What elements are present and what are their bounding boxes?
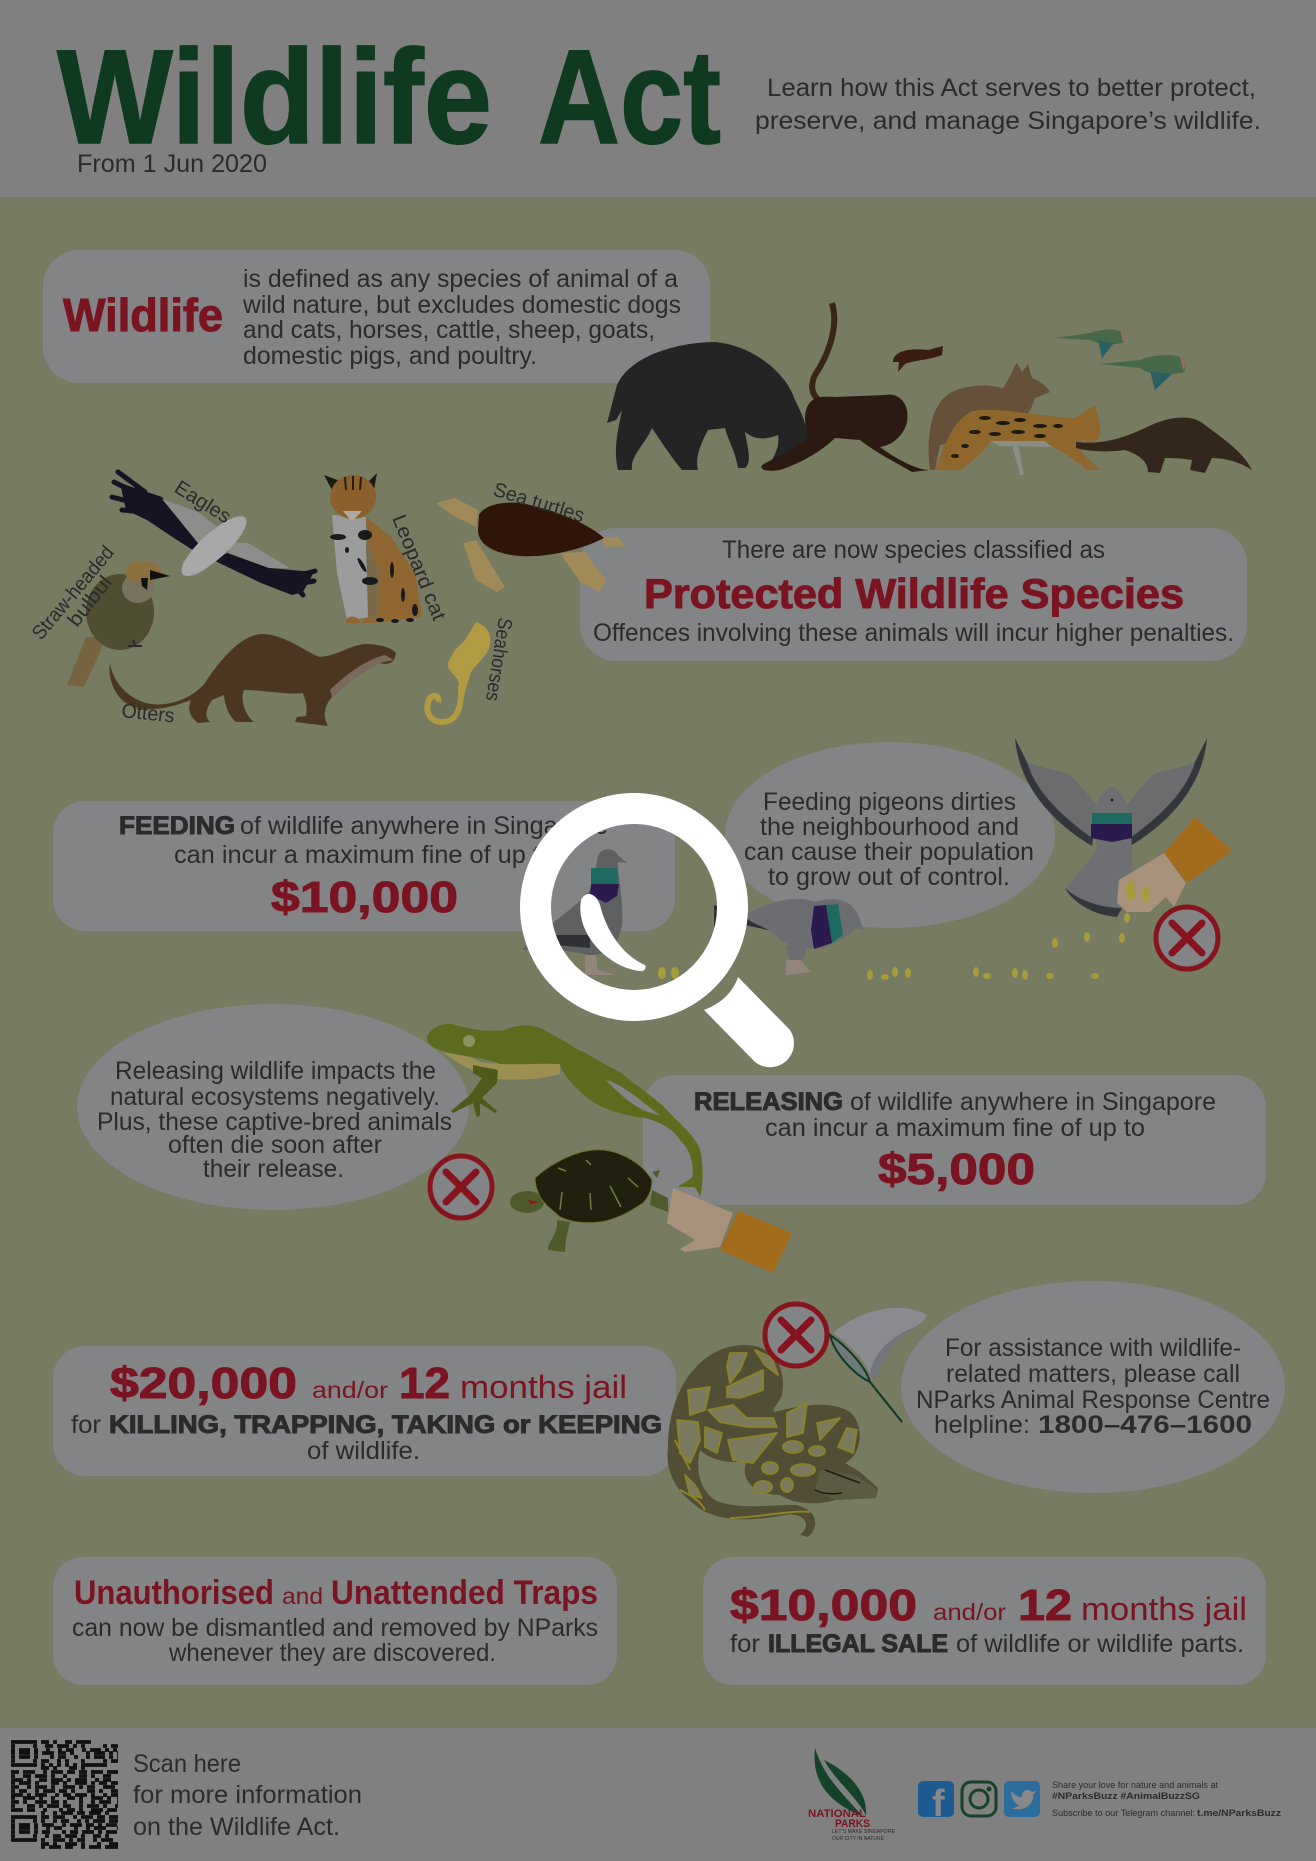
- title: Act: [538, 23, 721, 172]
- panel: wildlife definition: Wildlife: [63, 289, 223, 341]
- animal: parrot two: [1100, 355, 1187, 390]
- panel: feeding fine: can incur a maximum fine of up to: [174, 841, 554, 869]
- panel: wildlife definition: is defined as any species of animal of a: [243, 265, 678, 293]
- panel: killing penalty: of wildlife.: [307, 1437, 420, 1465]
- callout: feeding pigeons: the neighbourhood and: [760, 813, 1019, 841]
- callout: releasing impact: Plus, these captive-bred animals: [97, 1108, 452, 1136]
- panel: killing penalty: months jail: [460, 1369, 627, 1405]
- panel: illegal sale: 12: [1018, 1581, 1072, 1630]
- logo: National Parks: [808, 1748, 896, 1842]
- callout: releasing impact: [77, 1004, 469, 1210]
- panel: feeding fine: FEEDING: [119, 812, 235, 840]
- label: eagles: Eagles: [170, 477, 235, 528]
- logo: National Parks: PARKS: [835, 1818, 870, 1830]
- label: sea turtles: Sea turtles: [491, 479, 587, 527]
- header band: [0, 0, 1316, 197]
- panel: releasing fine: [643, 1075, 1266, 1205]
- icon: twitter: [1004, 1781, 1040, 1817]
- effective date: From 1 Jun 2020: [77, 150, 267, 178]
- label: seahorses: Seahorses: [481, 616, 516, 703]
- panel: illegal sale: $10,000: [730, 1581, 917, 1630]
- icon: prohibited sign killing: [765, 1304, 827, 1366]
- icon: python: [667, 1345, 878, 1537]
- animal: eagle: [112, 472, 315, 595]
- panel: traps: whenever they are discovered.: [168, 1639, 496, 1667]
- panel: protected wildlife species: Offences involving these animals will incur higher penalties.: [593, 619, 1234, 647]
- icon: instagram: [962, 1782, 996, 1816]
- callout: releasing impact: often die soon after: [168, 1131, 382, 1159]
- icon: protected species group: [28, 472, 625, 728]
- panel: traps: can now be dismantled and removed by NParks: [72, 1614, 598, 1642]
- panel: killing penalty: and/or: [312, 1377, 388, 1403]
- callout: feeding pigeons: [725, 742, 1055, 928]
- animal: otter: [110, 634, 396, 726]
- panel: killing penalty: [53, 1346, 676, 1476]
- social media text: Subscribe to our Telegram channel:: [1052, 1808, 1195, 1818]
- callout: helpline: helpline:: [934, 1411, 1030, 1439]
- panel: killing penalty: 12: [399, 1359, 450, 1408]
- callout: feeding pigeons: Feeding pigeons dirties: [763, 788, 1016, 816]
- panel: illegal sale: [703, 1557, 1266, 1685]
- panel: illegal sale: and/or: [933, 1599, 1006, 1625]
- callout: helpline: [901, 1281, 1285, 1493]
- animal: parrot one: [1055, 329, 1127, 358]
- animal: straw-headed bulbul: [67, 561, 170, 687]
- animal: sea turtle: [436, 498, 625, 592]
- animal: monkey: [762, 303, 929, 472]
- icon: terrapin: [510, 1150, 668, 1252]
- label: bulbul: bulbul: [64, 572, 117, 631]
- animal: leopard cat: [935, 405, 1100, 475]
- QR caption: on the Wildlife Act.: [133, 1813, 340, 1841]
- panel: killing penalty: KILLING, TRAPPING, TAKING or KEEPING: [109, 1411, 662, 1439]
- callout: releasing impact: their release.: [203, 1155, 344, 1183]
- panel: illegal sale: for: [730, 1630, 760, 1658]
- callout: helpline: related matters, please call: [946, 1360, 1240, 1388]
- social media text: #NParksBuzz #AnimalBuzzSG: [1052, 1791, 1200, 1801]
- social media text: t.me/NParksBuzz: [1197, 1808, 1282, 1818]
- panel: feeding fine: of wildlife anywhere in Singapore: [240, 812, 608, 840]
- logo: National Parks: NATIONAL: [808, 1808, 866, 1820]
- callout: releasing impact: Releasing wildlife impacts the: [115, 1057, 436, 1085]
- panel: killing penalty: $20,000: [110, 1359, 297, 1408]
- animal: seated leopard cat: [324, 473, 422, 623]
- panel: releasing fine: of wildlife anywhere in Singapore: [850, 1088, 1216, 1116]
- label: otters: Otters: [120, 700, 175, 728]
- panel: traps: Unauthorised: [74, 1574, 274, 1612]
- callout: feeding pigeons: to grow out of control.: [768, 863, 1010, 891]
- panel: feeding fine: [53, 801, 675, 931]
- label: straw-headed: Straw-headed: [28, 542, 119, 644]
- icon: facebook: f: [932, 1783, 945, 1825]
- QR caption: Scan here: [133, 1750, 241, 1778]
- subtitle: Learn how this Act serves to better protect,: [767, 74, 1256, 102]
- animal: mouse deer: [929, 363, 1050, 470]
- panel: killing penalty: for: [71, 1411, 101, 1439]
- panel: wildlife definition: domestic pigs, and poultry.: [243, 342, 537, 370]
- logo: National Parks: OUR CITY IN NATURE: [832, 1836, 885, 1842]
- icon: magnifying glass: [536, 808, 794, 1067]
- panel: wildlife definition: and cats, horses, cattle, sheep, goats,: [243, 316, 655, 344]
- panel: traps: Unattended Traps: [331, 1574, 598, 1612]
- callout: helpline: For assistance with wildlife-: [945, 1334, 1241, 1362]
- callout: releasing impact: natural ecosystems negatively.: [110, 1083, 440, 1111]
- icon: scattered seeds: [658, 913, 1130, 980]
- callout: helpline: NParks Animal Response Centre: [916, 1386, 1270, 1414]
- panel: protected wildlife species: There are now species classified as: [722, 536, 1105, 564]
- QR code: [11, 1742, 118, 1847]
- animal: wild boar: [607, 342, 810, 470]
- icon: releasing hand: [667, 1188, 792, 1273]
- footer band: [0, 1728, 1316, 1861]
- panel: protected wildlife species: [580, 528, 1247, 661]
- subtitle: [755, 74, 1261, 135]
- icon: snake hook: [830, 1308, 927, 1422]
- icon: hand feeding seeds: [1117, 817, 1232, 912]
- icon: prohibited sign feeding: [1156, 907, 1218, 969]
- icon: facebook: [918, 1781, 954, 1825]
- callout: helpline: 1800–476–1600: [1038, 1411, 1252, 1439]
- panel: releasing fine: can incur a maximum fine of up to: [765, 1114, 1145, 1142]
- panel: protected wildlife species: Protected Wildlife Species: [644, 570, 1184, 617]
- QR caption: [133, 1750, 362, 1841]
- panel: releasing fine: RELEASING: [694, 1088, 843, 1116]
- panel: traps: and: [282, 1583, 323, 1609]
- callout: feeding pigeons: can cause their population: [744, 838, 1034, 866]
- panel: releasing fine: $5,000: [878, 1145, 1035, 1194]
- panel: wildlife definition: wild nature, but excludes domestic dogs: [242, 291, 681, 319]
- label: leopard cat: Leopard cat: [387, 512, 450, 624]
- title: Wildlife: [57, 23, 492, 172]
- QR caption: for more information: [133, 1781, 362, 1809]
- icon: flying pigeon: [1015, 738, 1207, 917]
- panel: illegal sale: months jail: [1081, 1591, 1247, 1627]
- panel: wildlife definition: [43, 250, 710, 383]
- panel: illegal sale: ILLEGAL SALE: [768, 1630, 948, 1658]
- icon: row of wild animals: [607, 303, 1252, 475]
- subtitle: preserve, and manage Singapore’s wildlife.: [755, 107, 1261, 135]
- panel: illegal sale: of wildlife or wildlife parts.: [956, 1630, 1244, 1658]
- icon: frog: [427, 1024, 703, 1197]
- icon: prohibited sign releasing: [430, 1156, 492, 1218]
- social media text: [1052, 1780, 1282, 1818]
- icon: pecking pigeon: [714, 899, 864, 975]
- social media text: Share your love for nature and animals at: [1052, 1780, 1219, 1790]
- logo: National Parks: LET’S MAKE SINGAPORE: [832, 1829, 896, 1835]
- animal: pangolin: [1076, 418, 1252, 473]
- panel: traps: [53, 1557, 617, 1685]
- animal: squirrel: [893, 346, 943, 372]
- animal: seahorse: [427, 622, 490, 722]
- panel: feeding fine: $10,000: [271, 873, 458, 922]
- icon: standing pigeon: [522, 849, 627, 975]
